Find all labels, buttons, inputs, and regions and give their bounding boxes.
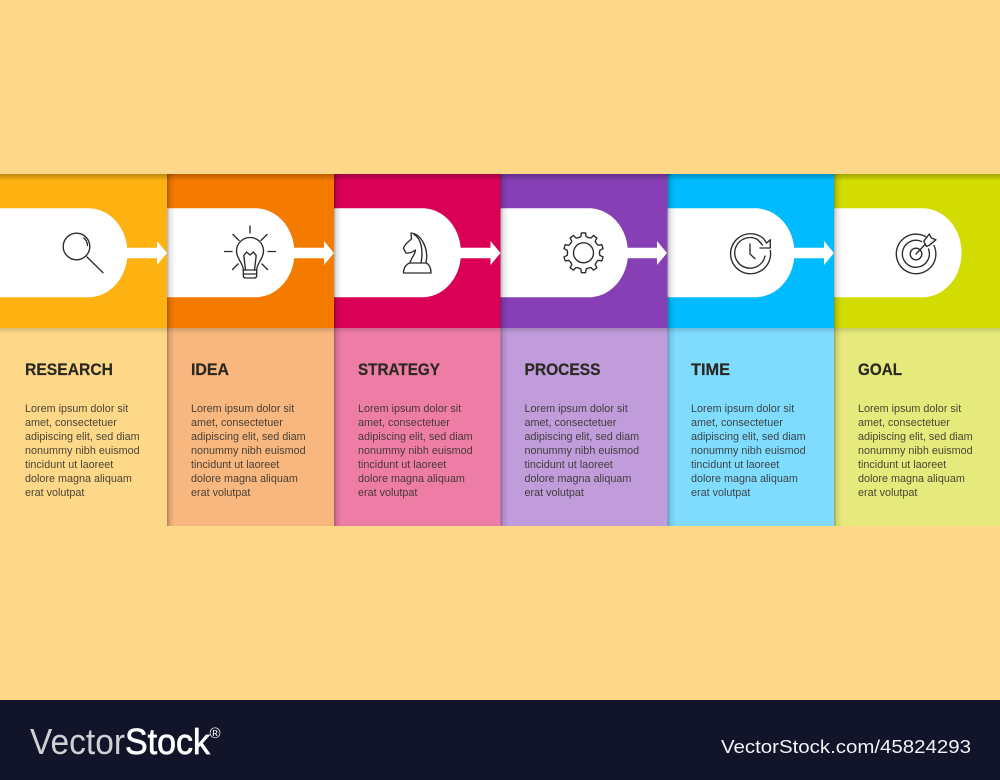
body text: time: adipiscing elit, sed diam xyxy=(691,431,806,443)
white arrow pill: process xyxy=(500,208,667,297)
icon: magnifying glass xyxy=(63,233,103,273)
body text: strategy: nonummy nibh euismod xyxy=(358,445,473,457)
colored header: strategy xyxy=(334,174,501,328)
body text: goal: nonummy nibh euismod xyxy=(858,445,973,457)
pale body: idea xyxy=(167,328,334,526)
logo: Stock: Stock xyxy=(125,721,211,762)
icon: target with arrow xyxy=(896,234,936,274)
colored header: research xyxy=(0,174,167,328)
body text: idea: amet, consectetuer xyxy=(191,417,283,429)
body text: goal: Lorem ipsum dolor sit xyxy=(858,403,961,415)
logo: VectorStock: Vector xyxy=(30,721,125,762)
body text: process: Lorem ipsum dolor sit xyxy=(524,403,628,415)
body text: idea: tincidunt ut laoreet xyxy=(191,459,279,471)
heading: goal: GOAL xyxy=(858,360,902,379)
body text: research: Lorem ipsum dolor sit xyxy=(25,403,128,415)
panel: idea xyxy=(167,174,334,526)
white arrow pill: idea xyxy=(167,208,334,297)
body text: time: nonummy nibh euismod xyxy=(691,445,806,457)
pale body: process xyxy=(500,328,668,526)
pale body: research xyxy=(0,328,167,526)
image id: VectorStock.com/45824293 xyxy=(721,736,971,757)
icon: light bulb xyxy=(224,226,276,278)
logo: registered mark: ® xyxy=(210,725,221,742)
icon: chess knight xyxy=(404,233,431,273)
body text: process: nonummy nibh euismod xyxy=(524,445,639,457)
body text: process: erat volutpat xyxy=(524,487,584,499)
body text: research: amet, consectetuer xyxy=(25,417,117,429)
body text: research: tincidunt ut laoreet xyxy=(25,459,113,471)
body text: idea: dolore magna aliquam xyxy=(191,473,298,485)
body text: strategy: Lorem ipsum dolor sit xyxy=(358,403,461,415)
white arrow pill: research xyxy=(0,208,167,297)
panel: time xyxy=(668,174,834,526)
heading: process: PROCESS xyxy=(524,360,600,379)
body text: strategy: tincidunt ut laoreet xyxy=(358,459,446,471)
body text: goal: dolore magna aliquam xyxy=(858,473,965,485)
white arrow pill: strategy xyxy=(334,208,500,297)
heading: strategy: STRATEGY xyxy=(358,360,441,379)
white pill: goal xyxy=(834,208,962,297)
colored header: goal xyxy=(834,174,1000,328)
body text: time: erat volutpat xyxy=(691,487,750,499)
body text: strategy: amet, consectetuer xyxy=(358,417,450,429)
body text: strategy: adipiscing elit, sed diam xyxy=(358,431,473,443)
footer bar xyxy=(0,700,1000,780)
body text: idea: Lorem ipsum dolor sit xyxy=(191,403,294,415)
body text: strategy: erat volutpat xyxy=(358,487,417,499)
pale body: goal xyxy=(834,328,1000,526)
panel: goal xyxy=(834,174,1000,526)
body text: strategy: dolore magna aliquam xyxy=(358,473,465,485)
body text: goal: amet, consectetuer xyxy=(858,417,950,429)
heading: research: RESEARCH xyxy=(25,360,113,379)
panel: process xyxy=(500,174,668,526)
colored header: time xyxy=(668,174,834,328)
body text: research: dolore magna aliquam xyxy=(25,473,132,485)
panel: research xyxy=(0,174,167,526)
colored header: process xyxy=(500,174,668,328)
icon: gear xyxy=(563,233,604,273)
body text: goal: adipiscing elit, sed diam xyxy=(858,431,973,443)
heading: idea: IDEA xyxy=(191,360,229,379)
body text: time: amet, consectetuer xyxy=(691,417,783,429)
body text: goal: erat volutpat xyxy=(858,487,917,499)
panel: strategy xyxy=(334,174,501,526)
body text: time: tincidunt ut laoreet xyxy=(691,459,779,471)
body text: process: amet, consectetuer xyxy=(524,417,617,429)
body text: idea: adipiscing elit, sed diam xyxy=(191,431,306,443)
body text: process: tincidunt ut laoreet xyxy=(524,459,613,471)
heading: time: TIME xyxy=(691,360,730,379)
body text: time: dolore magna aliquam xyxy=(691,473,798,485)
body text: idea: erat volutpat xyxy=(191,487,250,499)
icon: clock with arrow xyxy=(731,234,771,274)
pale body: strategy xyxy=(334,328,501,526)
pale body: time xyxy=(668,328,834,526)
body text: research: erat volutpat xyxy=(25,487,84,499)
body text: research: nonummy nibh euismod xyxy=(25,445,140,457)
body text: idea: nonummy nibh euismod xyxy=(191,445,306,457)
body text: time: Lorem ipsum dolor sit xyxy=(691,403,794,415)
body text: goal: tincidunt ut laoreet xyxy=(858,459,946,471)
body text: process: adipiscing elit, sed diam xyxy=(524,431,639,443)
body text: research: adipiscing elit, sed diam xyxy=(25,431,140,443)
colored header: idea xyxy=(167,174,334,328)
body text: process: dolore magna aliquam xyxy=(524,473,631,485)
white arrow pill: time xyxy=(668,208,834,297)
